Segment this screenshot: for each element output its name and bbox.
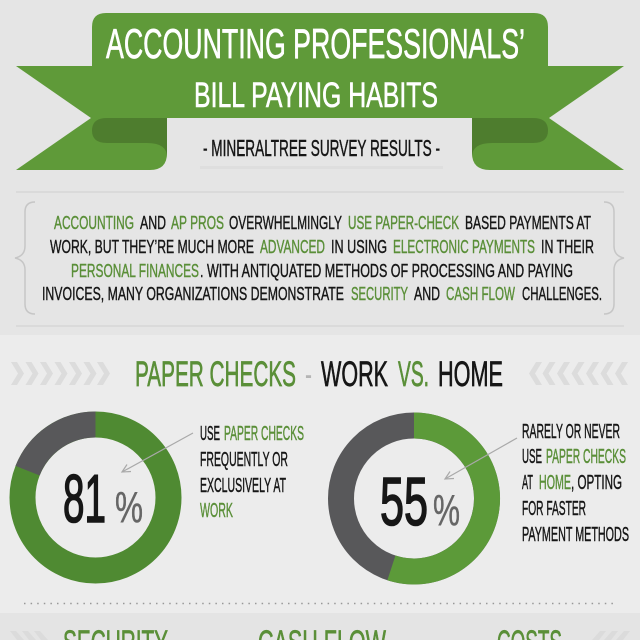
- right brace: [604, 202, 624, 314]
- intro paragraph: ADVANCED: [260, 237, 325, 257]
- intro paragraph: AND: [140, 213, 166, 233]
- subtitle shadow: [200, 166, 443, 169]
- bottom right chevrons: [592, 631, 630, 640]
- section heading: paper checks work vs home: -: [305, 355, 312, 394]
- title banner ribbon: [16, 13, 624, 170]
- work description: PAPER CHECKS: [224, 423, 304, 445]
- section heading: paper checks work vs home: HOME: [438, 355, 503, 394]
- home description: USE: [522, 446, 542, 468]
- section heading: paper checks work vs home: WORK: [321, 355, 388, 394]
- arrow to 81%: [122, 433, 193, 472]
- intro paragraph: [42, 213, 602, 304]
- home description: [522, 421, 629, 546]
- intro paragraph: OVERWHELMINGLY: [229, 213, 342, 233]
- value: 81%: %: [115, 483, 143, 532]
- left brace: [15, 202, 35, 314]
- section heading: paper checks work vs home: PAPER CHECKS: [135, 355, 296, 394]
- work description: EXCLUSIVELY AT: [200, 475, 286, 497]
- intro paragraph: USE PAPER-CHECK: [348, 213, 459, 233]
- home description: AT: [522, 472, 533, 494]
- intro paragraph: SECURITY: [351, 284, 408, 304]
- value: 55%: 55: [380, 464, 428, 540]
- work description: [200, 423, 304, 522]
- section heading: paper checks work vs home: VS.: [398, 355, 429, 394]
- intro paragraph: CASH FLOW: [446, 284, 515, 304]
- bottom left chevrons: [10, 631, 48, 640]
- value: 55%: %: [433, 486, 460, 535]
- value: 81%: 81: [63, 461, 106, 537]
- work description: WORK: [200, 500, 233, 522]
- title line 2: BILL PAYING HABITS: [194, 76, 438, 115]
- left chevrons: [11, 362, 110, 385]
- arrow to 55%: [445, 438, 517, 479]
- work description: USE: [200, 423, 220, 445]
- subtitle: - MINERALTREE SURVEY RESULTS -: [203, 135, 440, 161]
- bottom band: [0, 613, 640, 640]
- intro paragraph: PERSONAL FINANCES: [71, 261, 199, 281]
- donut chart: 81% work: [22, 424, 168, 570]
- right chevrons: [529, 362, 628, 385]
- intro paragraph: WORK, BUT THEY’RE MUCH MORE: [50, 237, 254, 257]
- donut chart: 55% home: [341, 425, 487, 572]
- intro paragraph: AP PROS: [171, 213, 224, 233]
- intro paragraph: AND: [414, 284, 440, 304]
- intro paragraph: ACCOUNTING: [54, 213, 134, 233]
- bottom headings: [63, 624, 562, 640]
- intro paragraph: ELECTRONIC PAYMENTS: [393, 237, 535, 257]
- home description: HOME: [539, 472, 571, 494]
- intro paragraph: INVOICES, MANY ORGANIZATIONS DEMONSTRATE: [42, 284, 344, 304]
- intro paragraph: IN THEIR: [541, 237, 594, 257]
- work description: FREQUENTLY OR: [200, 449, 288, 471]
- intro paragraph: IN USING: [331, 237, 387, 257]
